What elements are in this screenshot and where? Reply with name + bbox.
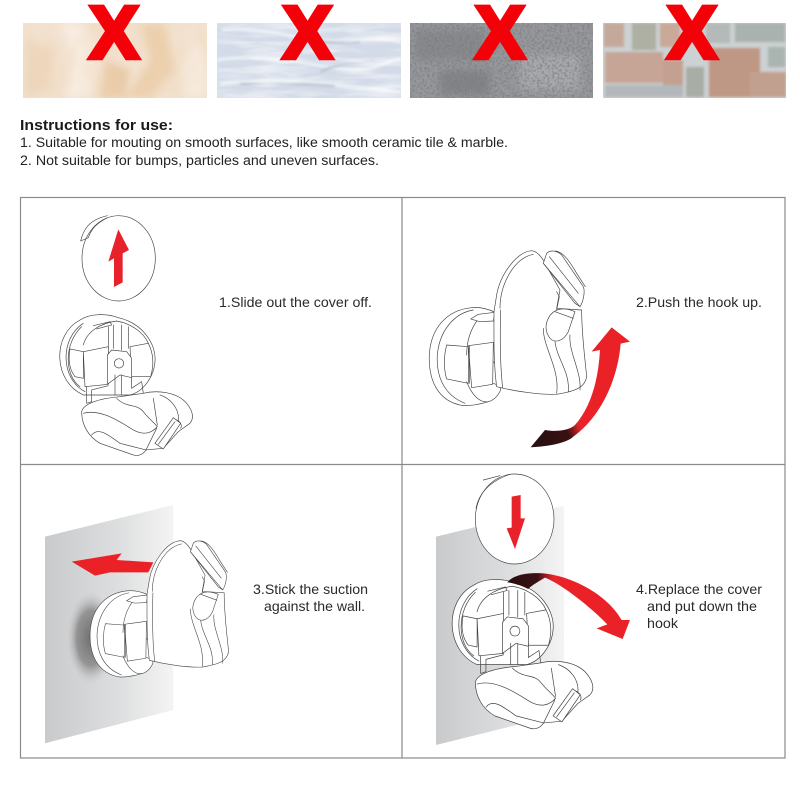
icon: suction hook folded down (452, 579, 593, 729)
step 4 label: 4.Replace the cover (636, 581, 762, 597)
instructions heading: Instructions for use: (20, 117, 173, 134)
instructions text block (20, 117, 508, 168)
suction shadow (67, 592, 115, 684)
panel: step 4 replace cover (436, 474, 762, 745)
surface photo: beige marble (23, 23, 207, 98)
instruction line 1: 1. Suitable for mouting on smooth surfaces, like smooth ceramic tile & marble. (20, 135, 508, 150)
step grid frame (20, 198, 785, 758)
step 4 label: hook (647, 615, 679, 631)
arrow: down red (507, 495, 525, 549)
step 2 label: 2.Push the hook up. (636, 294, 762, 310)
icon: suction hook raised (429, 251, 587, 406)
surface photo: brick wall (603, 23, 786, 98)
panel: step 1 slide cover off (60, 216, 372, 456)
icon: cover disc (81, 216, 155, 301)
icon: cover disc (475, 474, 554, 564)
step 3 label: against the wall. (264, 598, 365, 614)
panel: step 2 push hook up (429, 251, 762, 447)
arrow: curved up (531, 327, 630, 447)
icon: suction hook folded down (60, 315, 192, 456)
step 1 label: 1.Slide out the cover off. (219, 294, 372, 310)
surface photo: white stone (217, 23, 401, 98)
step 4 label: and put down the (647, 598, 757, 614)
surface photo: grey concrete (410, 23, 593, 98)
step 3 label (253, 581, 368, 614)
instruction line 2: 2. Not suitable for bumps, particles and uneven surfaces. (20, 153, 379, 168)
wall surface (436, 506, 564, 745)
step 4 label (636, 581, 762, 631)
panel: step 3 stick to wall (45, 505, 368, 743)
arrow: left red (72, 553, 153, 576)
arrow: curved down (507, 573, 630, 639)
arrow: up red (108, 229, 129, 287)
icon: suction hook raised (90, 541, 229, 677)
step 3 label: 3.Stick the suction (253, 581, 368, 597)
wall surface (45, 505, 173, 743)
